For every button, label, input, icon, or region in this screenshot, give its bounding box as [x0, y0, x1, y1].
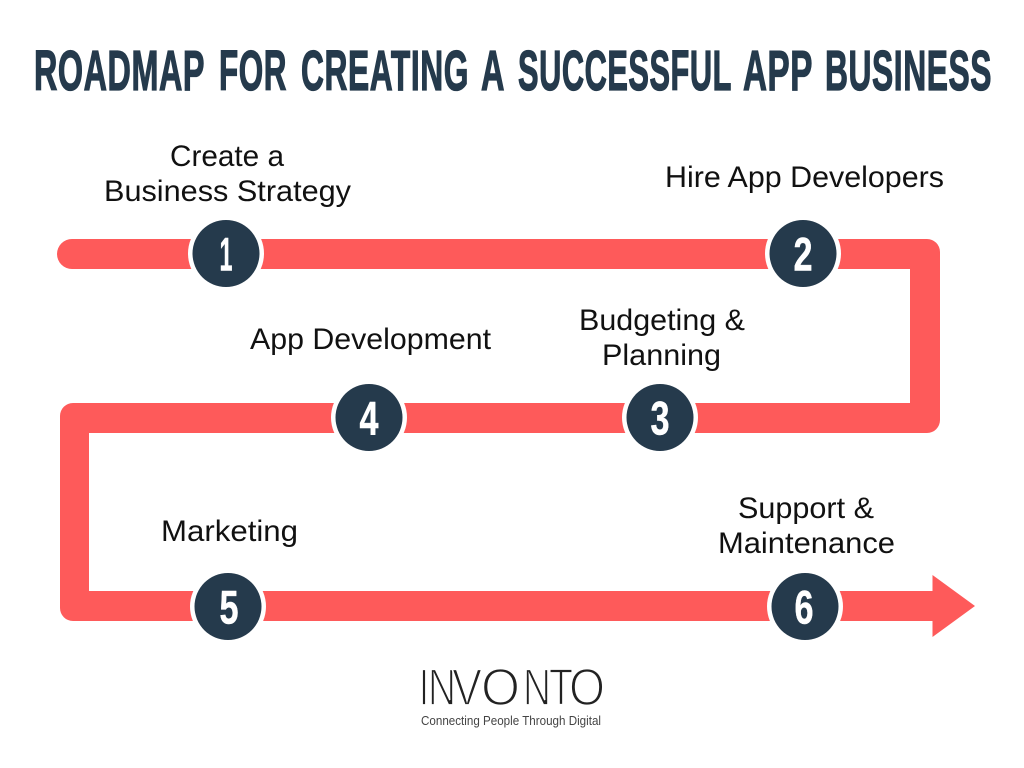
label: create a business strategy: Create a — [170, 140, 284, 173]
label: support and maintenance: Maintenance — [718, 527, 895, 560]
logo: invonto: T — [549, 659, 573, 717]
title: FOR — [219, 39, 287, 103]
title — [34, 39, 992, 103]
label: support and maintenance — [718, 492, 895, 560]
title: APP — [743, 39, 813, 103]
logo: invonto: O — [481, 659, 520, 717]
label: hire app developers: Hire App Developers — [665, 161, 944, 194]
logo: invonto: V — [452, 659, 482, 717]
step 4 marker — [331, 380, 407, 456]
label: support and maintenance: Support & — [738, 492, 874, 525]
step 2 marker — [765, 216, 841, 292]
logo tagline: Connecting People Through Digital — [421, 713, 601, 728]
label: budgeting and planning — [579, 304, 745, 372]
logo: invonto: N — [523, 659, 551, 717]
label: app development: App Development — [250, 323, 492, 356]
step 1 marker: 1 — [220, 228, 232, 280]
label: budgeting and planning: Budgeting & — [579, 304, 745, 337]
step 5 marker: 5 — [220, 580, 238, 634]
step 2 marker: 2 — [794, 228, 812, 280]
step 3 marker: 3 — [650, 392, 670, 444]
logo: invonto — [419, 659, 605, 728]
label: create a business strategy — [104, 140, 351, 208]
logo: invonto: O — [569, 659, 605, 717]
title: CREATING — [301, 39, 469, 103]
step 1 marker — [188, 216, 264, 292]
label: marketing: Marketing — [161, 515, 298, 548]
step 4 marker: 4 — [360, 392, 378, 444]
step 6 marker — [767, 568, 843, 644]
roadmap path with arrow — [57, 239, 975, 637]
title: SUCCESSFUL — [518, 39, 732, 103]
logo: invonto: I — [419, 659, 429, 717]
step 5 marker — [190, 568, 266, 644]
logo: invonto: N — [428, 659, 456, 717]
label: create a business strategy: Business Strategy — [104, 175, 351, 208]
label: budgeting and planning: Planning — [602, 339, 721, 372]
title: ROADMAP — [34, 39, 205, 103]
step 3 marker — [622, 380, 698, 456]
title: A — [481, 39, 505, 103]
step 6 marker: 6 — [794, 580, 814, 634]
